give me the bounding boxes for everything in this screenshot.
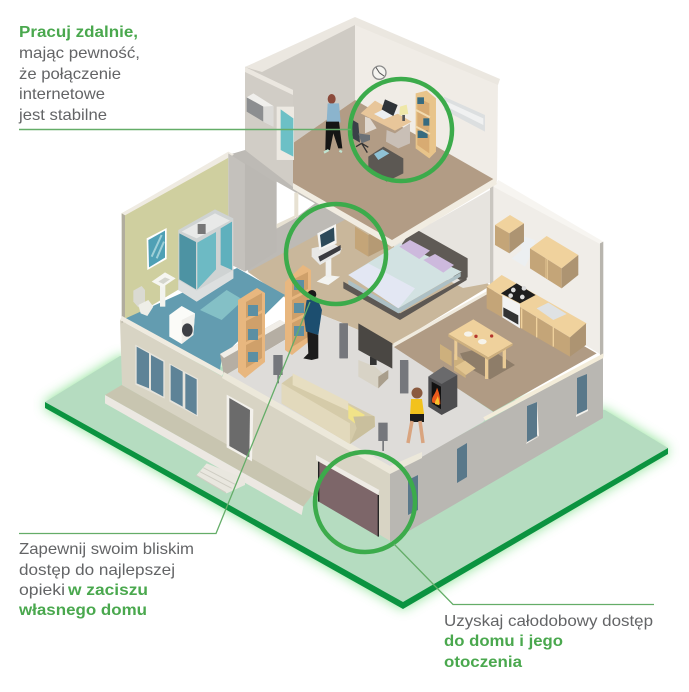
right wall windows [408, 374, 588, 515]
bathroom floor [122, 268, 285, 370]
ground floor interior [120, 150, 603, 474]
text: remote work [18, 24, 140, 124]
leader: remote work [19, 128, 351, 130]
side wall [245, 67, 293, 187]
dining table and chairs [440, 319, 515, 379]
laptop [374, 99, 398, 119]
bedroom back wall [228, 150, 400, 272]
bedroom wall [393, 190, 490, 288]
clock [373, 66, 386, 79]
speakers [273, 323, 408, 451]
kitchen rear wall [393, 180, 603, 421]
wall AC [444, 97, 485, 132]
circle: medical monitor [286, 204, 386, 304]
text: care at home: dostęp do najlepszej [19, 562, 175, 579]
low partition [220, 320, 288, 376]
kitchen floor [393, 292, 597, 412]
highlight circles [286, 79, 452, 552]
armchair [368, 147, 403, 182]
sink [152, 272, 176, 307]
window above bedroom [277, 182, 315, 229]
man standing at bookcase [303, 290, 322, 360]
sofa [282, 373, 375, 444]
toilet [133, 286, 153, 316]
right wall [390, 357, 603, 542]
text: remote work: Pracuj zdalnie, [19, 24, 138, 41]
base cabinets [487, 275, 587, 357]
terrace and steps [105, 385, 313, 515]
outdoor AC unit [247, 93, 273, 127]
cooker [501, 283, 536, 328]
text: care at home: opieki [19, 582, 65, 599]
leader: care [19, 302, 310, 534]
ground floor exterior [105, 320, 603, 542]
bedroom furniture [339, 215, 587, 415]
window [147, 228, 167, 270]
leader: garage access [394, 544, 654, 604]
text: round-the-clock access: otoczenia [444, 654, 522, 671]
bed [343, 230, 468, 320]
text: remote work: jest stabilne [18, 107, 107, 124]
ground plate [45, 356, 668, 609]
woman in yellow [408, 388, 424, 443]
medical monitor cart [312, 224, 342, 285]
desk [361, 101, 412, 148]
text: remote work: internetowe [19, 86, 105, 103]
bathroom furniture [133, 209, 243, 344]
text: remote work: mając pewność, [19, 45, 140, 62]
back walls [245, 22, 355, 143]
bookcases [238, 265, 311, 378]
front wall [120, 320, 392, 542]
leader lines [19, 130, 654, 604]
text: round-the-clock access: do domu i jego [444, 633, 563, 650]
woman [324, 94, 342, 153]
text: round-the-clock access: Uzyskaj całodobowy dostęp [444, 613, 653, 630]
bookcase [416, 91, 436, 158]
bedroom floor [248, 190, 490, 345]
cupboard in bedroom [355, 225, 388, 257]
rug [200, 290, 243, 320]
fireplace [428, 367, 457, 415]
bathroom wall [122, 152, 277, 323]
floor [293, 100, 495, 243]
upper floor [245, 17, 500, 247]
circle: home office [350, 79, 452, 181]
living room floor [224, 313, 493, 470]
bath floor front edge [120, 316, 224, 376]
text: remote work: że połączenie [19, 66, 121, 83]
text: care at home: Zapewnij swoim bliskim [19, 541, 194, 558]
circle: garage door [315, 452, 415, 552]
window [277, 107, 294, 160]
text: care at home: w zaciszu [67, 582, 148, 599]
front living floor edge [222, 372, 422, 474]
TV and cabinet [358, 323, 392, 388]
text: round-the-clock access [444, 613, 653, 671]
wall cabinets and hood [495, 215, 578, 288]
living room furniture [273, 323, 408, 451]
speakers [339, 323, 408, 393]
front windows, door and garage [135, 345, 379, 537]
washing machine [169, 306, 195, 344]
lamp [399, 105, 408, 121]
text: care at home [18, 541, 194, 619]
office chair [352, 119, 370, 153]
shower [178, 209, 233, 302]
furnishing in office [247, 66, 485, 182]
text: care at home: własnego domu [18, 602, 147, 619]
